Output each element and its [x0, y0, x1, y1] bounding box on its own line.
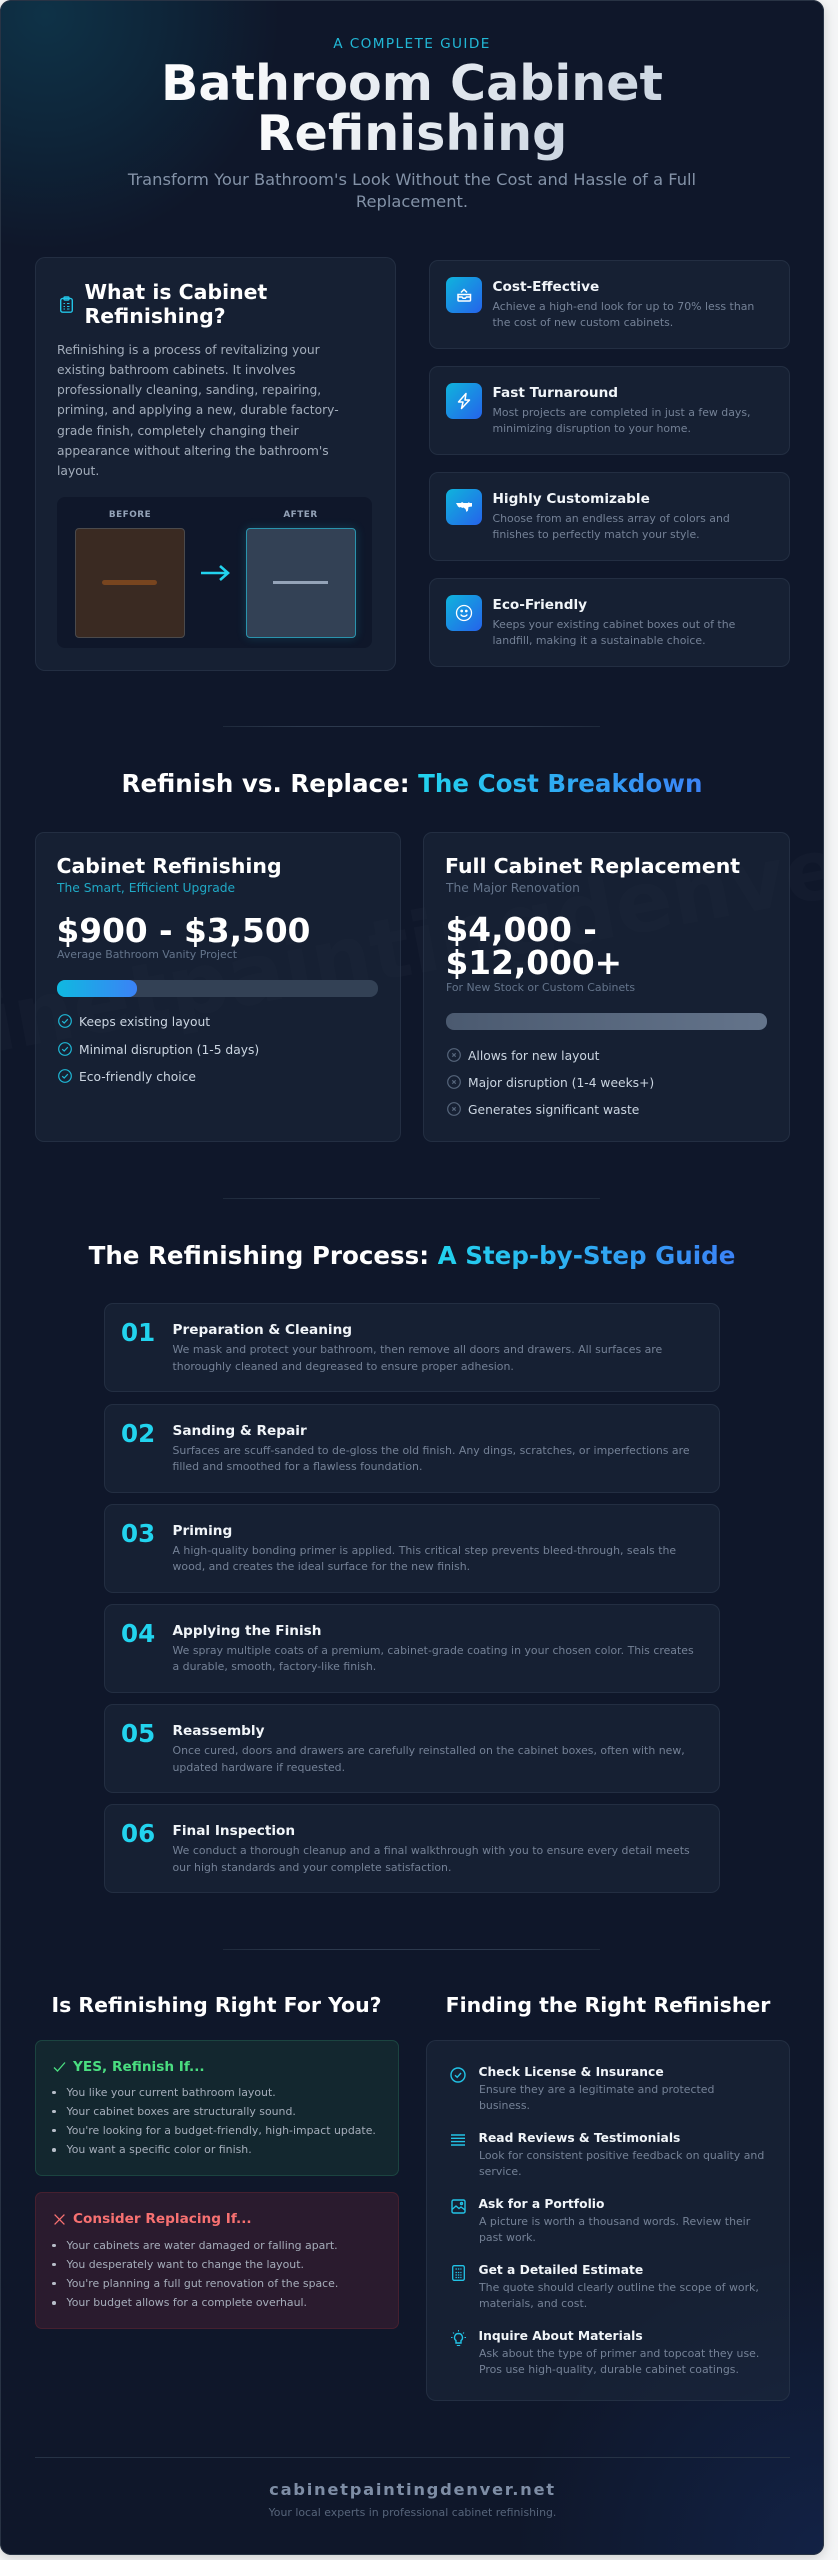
item text: Generates significant waste: [468, 1103, 639, 1117]
subtitle: Transform Your Bathroom's Look Without the Cost and Hassle of a Full: [128, 170, 696, 189]
tagline: Your local experts in professional cabinet refinishing.: [269, 2506, 556, 2519]
tip title: Get a Detailed Estimate: [478, 2263, 643, 2277]
card text: minimizing disruption to your home.: [492, 422, 691, 435]
card text: [492, 618, 735, 647]
step 6: [104, 1804, 720, 1893]
step text: thoroughly cleaned and degreased to ensure proper adhesion.: [172, 1360, 514, 1373]
icon: check: [58, 1042, 72, 1056]
panel: yes, refinish if: [35, 2040, 399, 2176]
card title: Highly Customizable: [492, 491, 650, 507]
tip: portfolio: [450, 2195, 780, 2251]
bullet list: You're looking for a budget-friendly, high-impact update.: [66, 2124, 376, 2137]
title: Refinishing: [257, 104, 567, 162]
tip title: Check License & Insurance: [478, 2065, 664, 2079]
step title: Final Inspection: [172, 1823, 295, 1839]
check item: [58, 1014, 210, 1029]
bullet list: [52, 2238, 338, 2309]
item text: Eco-friendly choice: [79, 1070, 196, 1084]
icon: check: [54, 2062, 66, 2072]
card title: Fast Turnaround: [492, 385, 618, 401]
icon: paint swatch: [446, 489, 482, 525]
description: layout.: [57, 464, 99, 478]
bullet list: You desperately want to change the layout.: [66, 2258, 304, 2271]
heading: Refinishing?: [84, 304, 226, 328]
icon: check: [58, 1014, 72, 1028]
title: [161, 54, 663, 162]
heading: cost breakdown: Refinish vs. Replace: The Cost Breakdown: [122, 769, 702, 798]
tip text: business.: [479, 2099, 530, 2112]
step title: Priming: [172, 1523, 232, 1539]
icon: lightning: [446, 383, 482, 419]
panel: cabinet refinishing cost: [35, 832, 401, 1142]
step text: [172, 1343, 662, 1373]
tip: reviews: [451, 2131, 764, 2178]
bullet list: You want a specific color or finish.: [66, 2143, 252, 2156]
label: after: AFTER: [283, 510, 318, 520]
heading: is refinishing right: Is Refinishing Right For You?: [52, 1993, 382, 2017]
tip: materials: [450, 2327, 780, 2383]
card heading: Full Cabinet Replacement: [445, 854, 740, 878]
icon: cross: [54, 2214, 65, 2225]
price caption: Average Bathroom Vanity Project: [57, 948, 237, 961]
heading: process: The Refinishing Process: A Step-by-Step Guide: [89, 1241, 735, 1270]
card title: Eco-Friendly: [492, 597, 587, 613]
step number: 02: [121, 1418, 155, 1448]
cost bar fill: [57, 980, 137, 996]
icon: cross: [447, 1075, 461, 1089]
panel: what is cabinet refinishing: [35, 257, 396, 671]
subtitle: [128, 170, 696, 211]
card text: [492, 406, 751, 435]
step text: A high-quality bonding primer is applied. This critical step prevents bleed-through, seals the: [172, 1544, 676, 1557]
card text: finishes to perfectly match your style.: [492, 528, 700, 541]
step title: Preparation & Cleaning: [172, 1322, 352, 1338]
card title: Cost-Effective: [492, 279, 599, 295]
step text: [172, 1844, 690, 1874]
step text: [172, 1744, 685, 1774]
box title: Consider Replacing If...: [73, 2211, 252, 2227]
description: existing bathroom cabinets. It involves: [57, 363, 296, 377]
step number: 01: [121, 1318, 155, 1347]
panel: full replacement cost: [423, 832, 790, 1142]
tip text: [479, 2083, 714, 2112]
tip text: A picture is worth a thousand words. Review their: [479, 2215, 750, 2228]
tagline: The Major Renovation: [446, 881, 580, 895]
cost bar: [57, 980, 378, 996]
bullet list: Your cabinet boxes are structurally sound.: [66, 2105, 296, 2118]
step text: We mask and protect your bathroom, then remove all doors and drawers. All surfaces are: [172, 1343, 662, 1356]
step title: Applying the Finish: [172, 1623, 322, 1639]
arrow: [201, 565, 230, 581]
step text: our high standards and your complete satisfaction.: [172, 1861, 451, 1874]
card text: Achieve a high-end look for up to 70% less than: [492, 300, 754, 313]
step text: Surfaces are scuff-sanded to de-gloss the old finish. Any dings, scratches, or imperfections are: [172, 1444, 690, 1456]
step text: a durable, smooth, factory-like finish.: [172, 1660, 376, 1673]
card text: [492, 300, 754, 329]
card text: Choose from an endless array of colors and: [492, 512, 730, 525]
step 1: [104, 1303, 720, 1392]
panel: highly customizable: [429, 472, 790, 561]
step text: [172, 1544, 676, 1573]
item text: Allows for new layout: [468, 1049, 599, 1063]
cabinet door: after: [246, 528, 356, 638]
step text: wood, and creates the ideal surface for the new finish.: [172, 1560, 470, 1573]
price: [446, 911, 622, 982]
step number: 05: [121, 1719, 155, 1748]
icon: piggy tray: [446, 277, 482, 313]
tip text: materials, and cost.: [479, 2297, 587, 2310]
step text: [172, 1644, 694, 1673]
card text: Most projects are completed in just a few days,: [492, 406, 751, 419]
tip text: [479, 2280, 759, 2313]
heading: finding the right refinisher: Finding the Right Refinisher: [446, 1993, 770, 2017]
cross item: [447, 1075, 654, 1090]
icon: cross: [447, 1102, 461, 1116]
step title: Reassembly: [172, 1723, 264, 1739]
price: $900 - $3,500: [56, 912, 310, 950]
cross item: [447, 1048, 600, 1063]
step number: 04: [121, 1619, 155, 1648]
description: [57, 343, 339, 478]
bullet list: Your budget allows for a complete overhaul.: [66, 2296, 307, 2309]
panel: eco-friendly: [429, 578, 790, 667]
price caption: For New Stock or Custom Cabinets: [446, 981, 635, 994]
card text: Keeps your existing cabinet boxes out of the: [492, 618, 735, 631]
cost bar: [446, 1013, 767, 1030]
door handle: [272, 581, 328, 584]
cabinet door: before: [75, 528, 185, 638]
card heading: Cabinet Refinishing: [56, 854, 282, 878]
card text: landfill, making it a sustainable choice.: [492, 634, 706, 647]
label: before: BEFORE: [109, 510, 151, 520]
step text: [172, 1444, 690, 1473]
description: professionally cleaning, sanding, repairing,: [57, 383, 321, 397]
bullet list: [52, 2086, 376, 2156]
icon: light bulb: [450, 2330, 467, 2347]
tip title: Read Reviews & Testimonials: [478, 2131, 680, 2145]
tip text: [479, 2214, 750, 2247]
step 2: [104, 1404, 720, 1492]
tip text: Ask about the type of primer and topcoat they use.: [479, 2347, 759, 2360]
domain: cabinetpaintingdenver.net: [269, 2480, 556, 2499]
door handle: [102, 580, 157, 585]
step 3: [104, 1504, 720, 1593]
step 5: [104, 1704, 720, 1793]
step text: updated hardware if requested.: [172, 1761, 345, 1774]
item text: Major disruption (1-4 weeks+): [468, 1076, 654, 1090]
title: Bathroom Cabinet: [161, 54, 663, 112]
tip text: Pros use high-quality, durable cabinet coatings.: [479, 2363, 739, 2376]
icon: picture: [451, 2199, 466, 2214]
icon: clipboard: [60, 296, 73, 313]
bullet list: Your cabinets are water damaged or falling apart.: [66, 2238, 338, 2252]
icon: check: [58, 1069, 72, 1083]
header: [128, 36, 696, 211]
tip text: service.: [479, 2165, 522, 2178]
bullet list: You like your current bathroom layout.: [66, 2086, 276, 2098]
step text: Once cured, doors and drawers are carefully reinstalled on the cabinet boxes, often with new,: [172, 1744, 685, 1757]
price: $4,000 -: [446, 911, 597, 949]
price: $12,000+: [446, 944, 622, 982]
bullet list: You're planning a full gut renovation of the space.: [66, 2277, 338, 2290]
footer: [35, 2457, 790, 2527]
step 4: [104, 1604, 720, 1693]
item text: Keeps existing layout: [79, 1015, 210, 1029]
tip: estimate: [450, 2261, 780, 2317]
panel: fast turnaround: [429, 366, 790, 455]
heading: What is Cabinet: [84, 280, 267, 304]
heading: [84, 280, 267, 328]
description: priming, and applying a new, durable factory-: [57, 403, 339, 417]
tip text: [479, 2346, 759, 2379]
icon: list lines: [451, 2134, 465, 2147]
step title: Sanding & Repair: [172, 1422, 307, 1438]
box title: YES, Refinish If...: [73, 2059, 205, 2075]
panel: cost-effective: [429, 260, 790, 349]
tip text: Look for consistent positive feedback on quality and: [479, 2149, 764, 2162]
check item: [58, 1069, 196, 1084]
icon: badge check: [450, 2067, 466, 2083]
card text: the cost of new custom cabinets.: [492, 316, 673, 329]
tagline: The Smart, Efficient Upgrade: [57, 881, 235, 895]
tip title: Ask for a Portfolio: [478, 2197, 604, 2211]
tip text: Ensure they are a legitimate and protected: [479, 2083, 714, 2096]
description: Refinishing is a process of revitalizing your: [57, 343, 320, 357]
panel: consider replacing if: [35, 2192, 399, 2328]
tip text: past work.: [479, 2231, 536, 2244]
panel: finding the right refinisher: [426, 2040, 790, 2401]
tip text: [479, 2148, 764, 2181]
step number: 06: [121, 1819, 155, 1848]
icon: cross: [447, 1048, 461, 1062]
eyebrow: A COMPLETE GUIDE: [333, 36, 491, 52]
cross item: [447, 1102, 639, 1117]
step text: filled and smoothed for a flawless foundation.: [172, 1460, 422, 1473]
tip: license: [450, 2065, 714, 2112]
card text: [492, 512, 730, 541]
before and after illustration: [57, 497, 372, 648]
tip title: Inquire About Materials: [478, 2329, 643, 2343]
step text: We spray multiple coats of a premium, cabinet-grade coating in your chosen color. This creates: [172, 1644, 694, 1657]
description: grade finish, completely changing their: [57, 424, 299, 438]
step text: We conduct a thorough cleanup and a final walkthrough with you to ensure every detail meets: [172, 1844, 690, 1857]
icon: smile: [446, 595, 482, 631]
item text: Minimal disruption (1-5 days): [79, 1043, 259, 1057]
tip text: The quote should clearly outline the scope of work,: [479, 2281, 759, 2294]
subtitle: Replacement.: [356, 192, 468, 211]
step number: 03: [121, 1519, 155, 1548]
check item: [58, 1042, 259, 1057]
description: appearance without altering the bathroom's: [57, 444, 329, 458]
icon: calculator: [452, 2265, 465, 2281]
